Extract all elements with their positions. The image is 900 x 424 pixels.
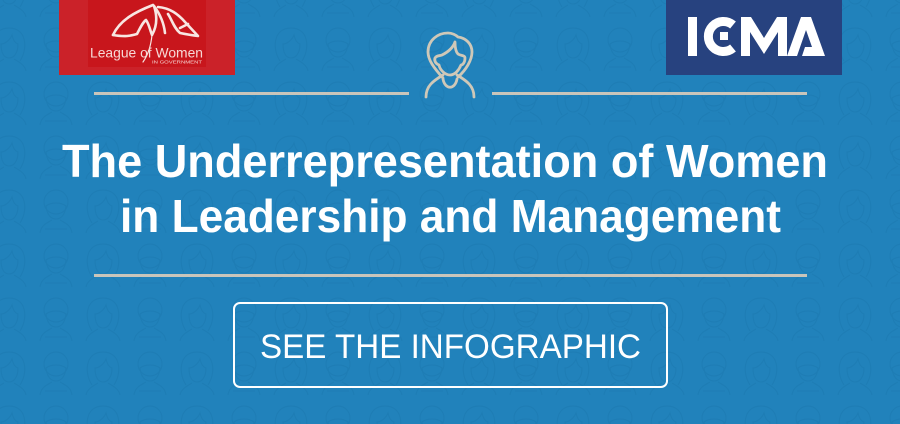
logo: ICMA: [666, 0, 842, 75]
title: in Leadership and Management: [120, 190, 781, 242]
top left divider: [94, 92, 409, 95]
title: [62, 135, 828, 242]
button: see the infographic: [234, 303, 667, 387]
logo: League of Women in Government: [59, 0, 235, 75]
bottom divider: [94, 274, 807, 277]
ICMA letters: [688, 17, 825, 56]
icon: woman: [426, 33, 474, 97]
logo wordmark: League of Women: [90, 44, 203, 60]
icon: umbrella emblem: [113, 5, 198, 62]
logo subtitle: IN GOVERNMENT: [152, 60, 202, 64]
title: The Underrepresentation of Women: [62, 135, 828, 187]
button: see the infographic: SEE THE INFOGRAPHIC: [260, 328, 641, 366]
top right divider: [492, 92, 807, 95]
